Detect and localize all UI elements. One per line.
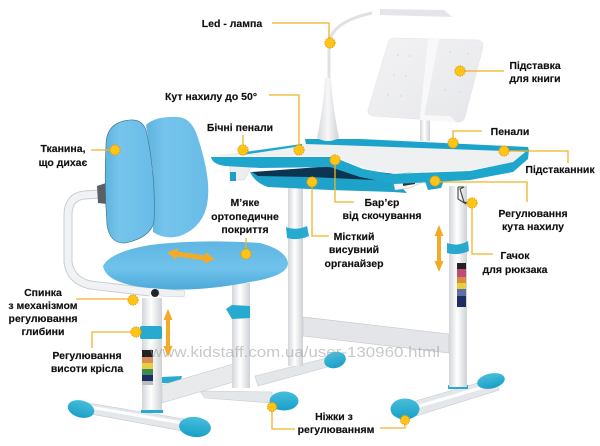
desk top blue edge bbox=[211, 149, 529, 184]
callout: anti-slip barrier: Бар’єр bbox=[365, 197, 399, 209]
callout: drawer organizer: органайзер bbox=[324, 258, 384, 270]
callout: soft orthopedic cover: покриття bbox=[221, 224, 269, 236]
callout: trays: Пенали bbox=[491, 126, 529, 138]
callout: backpack hook bbox=[467, 198, 548, 276]
desk brackets bbox=[230, 163, 512, 190]
callout: chair height adjustment: Регулювання bbox=[52, 350, 122, 362]
chair bbox=[66, 117, 298, 439]
callout: anti-slip barrier: від скочування bbox=[343, 210, 421, 222]
backrest frame bbox=[68, 194, 150, 292]
desk right collar bbox=[447, 241, 469, 254]
desk crossbar bbox=[303, 317, 449, 353]
callout: backpack hook: Гачок bbox=[500, 250, 530, 262]
callout: backrest depth mechanism: регулювання bbox=[9, 313, 77, 325]
callout: backrest depth mechanism: глибини bbox=[22, 326, 64, 338]
seat bbox=[103, 241, 288, 290]
callout: drawer organizer bbox=[307, 177, 384, 270]
callout: backpack hook: для рюкзака bbox=[482, 264, 548, 276]
desk left column bbox=[288, 180, 303, 366]
callout: chair height adjustment bbox=[51, 327, 141, 375]
callout: soft orthopedic cover: М’яке bbox=[231, 197, 260, 209]
desk right column bbox=[449, 186, 467, 387]
callout: trays bbox=[448, 126, 529, 148]
chair front collar bbox=[140, 326, 162, 339]
arrow: chair height bbox=[164, 309, 172, 357]
desk side trim bbox=[238, 144, 302, 155]
desk bbox=[211, 9, 529, 420]
callout: side trays bbox=[207, 122, 273, 155]
callout: tilt adjustment: кута нахилу bbox=[502, 221, 564, 233]
backrest bracket bbox=[97, 183, 107, 204]
callout: adjustable feet bbox=[268, 402, 410, 436]
callout: book stand bbox=[455, 60, 561, 85]
chair rear foot bbox=[162, 376, 298, 410]
desk rear foot bbox=[255, 349, 348, 386]
callout: led lamp bbox=[202, 18, 335, 48]
chair front foot bbox=[66, 397, 212, 439]
callout: anti-slip barrier bbox=[330, 155, 421, 222]
lamp bbox=[317, 9, 452, 141]
callout: book stand: для книги bbox=[509, 73, 561, 85]
callout: cup holder bbox=[499, 146, 595, 176]
callout: adjustable feet: Ніжки з bbox=[315, 411, 353, 423]
seat knob bbox=[151, 289, 159, 297]
book stand post bbox=[420, 120, 430, 141]
backrest left pad bbox=[105, 120, 154, 243]
desk left collar bbox=[286, 226, 309, 239]
desk height chart bbox=[457, 263, 466, 307]
chair post base ring bbox=[141, 410, 163, 413]
callout: soft orthopedic cover: ортопедичне bbox=[211, 211, 279, 223]
callout: drawer organizer: висувний bbox=[329, 244, 379, 256]
chair height chart bbox=[142, 350, 153, 385]
callout: tilt adjustment: Регулювання bbox=[498, 208, 568, 220]
desk drawer bbox=[250, 172, 407, 193]
callout: backrest depth mechanism: Спинка bbox=[24, 287, 62, 299]
chair crossbar bbox=[162, 362, 240, 403]
callout: backrest depth mechanism: з механізмом bbox=[8, 300, 78, 312]
callout: tilt adjustment bbox=[430, 176, 568, 233]
callout: led lamp: Led - лампа bbox=[202, 18, 262, 30]
chair front post bbox=[142, 298, 162, 412]
callout: book stand: Підставка bbox=[509, 60, 561, 72]
book stand bbox=[368, 38, 483, 122]
chair rear collar bbox=[226, 305, 250, 319]
callout: backrest depth mechanism bbox=[8, 287, 138, 338]
callout: soft orthopedic cover bbox=[211, 197, 279, 259]
callout: tilt angle bbox=[165, 91, 304, 155]
callout: drawer organizer: Місткий bbox=[334, 231, 374, 243]
callout: cup holder: Підстаканник bbox=[525, 164, 595, 176]
callout: breathable fabric: Тканина, bbox=[40, 143, 86, 155]
arrow: seat depth bbox=[166, 247, 216, 265]
callout: breathable fabric bbox=[39, 143, 120, 169]
chair rear post bbox=[232, 283, 250, 388]
desk top surface bbox=[213, 143, 528, 173]
backpack hook bbox=[458, 187, 472, 204]
watermark: www.kidstaff.com.ua/user-130960.html bbox=[149, 345, 440, 361]
arrow: desk height bbox=[434, 225, 444, 272]
callout: breathable fabric: що дихає bbox=[39, 157, 88, 169]
callout: adjustable feet: регулюванням bbox=[298, 424, 375, 436]
desk rear tray bbox=[305, 139, 529, 152]
callout: tilt angle: Кут нахилу до 50° bbox=[165, 91, 257, 103]
callout: chair height adjustment: висоти крісла bbox=[51, 363, 123, 375]
callout: side trays: Бічні пенали bbox=[207, 122, 273, 134]
backrest right pad bbox=[146, 117, 208, 237]
seat support bbox=[158, 288, 185, 297]
desk right foot bbox=[390, 371, 506, 420]
